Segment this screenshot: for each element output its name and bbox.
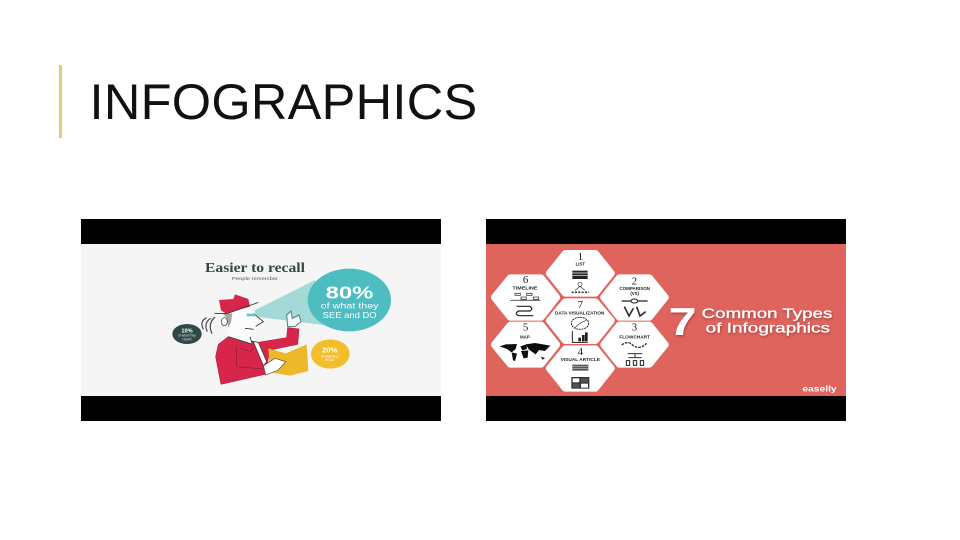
hair xyxy=(223,313,232,328)
heading: of infographics: of Infographics xyxy=(706,321,830,336)
callout: 80 percent xyxy=(308,269,391,331)
hexagon 1: list xyxy=(550,251,611,293)
hexagon 5: map: MAP xyxy=(520,335,530,340)
body and arm xyxy=(216,328,299,384)
hexagon 7: data visualization: 7 xyxy=(578,299,584,311)
hexagon 6: timeline: 6 xyxy=(523,274,529,286)
vision beam xyxy=(255,280,337,327)
callout: 10 percent: of what they xyxy=(178,334,196,338)
callout: 10 percent: HEAR xyxy=(182,337,192,341)
hexagon 6: timeline: TIMELINE xyxy=(512,285,538,290)
head xyxy=(226,306,263,344)
callout: 20 percent: of what they xyxy=(321,354,339,358)
figure: man reading a book xyxy=(202,294,308,384)
callout: 80 percent: of what they xyxy=(321,301,380,311)
hexagon 3: flowchart xyxy=(604,322,665,365)
eye xyxy=(247,314,255,316)
title accent bar xyxy=(59,65,62,138)
heading: easier to recall: Easier to recall xyxy=(205,260,305,275)
subheading: people remember: People remember xyxy=(232,276,279,281)
lower hand xyxy=(263,358,286,375)
hexagon 4: visual article xyxy=(550,346,611,389)
hexagon 4: visual article: VISUAL ARTICLE xyxy=(561,357,600,362)
hexagon 2: comparison xyxy=(604,275,665,317)
hexagon 7: data visualization: DATA VISUALIZATION xyxy=(555,311,604,316)
hexagon 5: map xyxy=(495,322,556,364)
hexagon 4: visual article: 4 xyxy=(578,346,584,358)
book xyxy=(268,344,308,376)
callout: 20 percent: READ xyxy=(325,358,335,362)
hexagon 1: list: LIST xyxy=(576,262,585,267)
panel: easier to recall image xyxy=(81,219,441,421)
hexagon 7: data visualization xyxy=(550,299,611,342)
callout: 10 percent: 10% xyxy=(181,328,193,334)
hexagon 6: timeline xyxy=(495,274,556,317)
hexagon 2: comparison: COMPARISON xyxy=(619,286,650,291)
callout: 10 percent xyxy=(172,324,202,344)
sound waves xyxy=(202,317,215,334)
hexagon 3: flowchart: 3 xyxy=(632,322,638,334)
jacket seams xyxy=(237,347,263,369)
tie xyxy=(253,342,267,366)
hexagon 5: map: 5 xyxy=(523,322,529,334)
callout: 20 percent: 20% xyxy=(322,346,338,355)
hexagon 1: list: 1 xyxy=(578,251,583,263)
heading: common types: Common Types xyxy=(702,306,833,321)
ear xyxy=(221,318,227,326)
hexagon 2: comparison: 2 xyxy=(632,275,637,287)
hexagon 3: flowchart: FLOWCHART xyxy=(619,335,650,340)
big numeral 7: 7 xyxy=(669,300,697,344)
panel: 7 common types image xyxy=(486,219,846,421)
callout: 20 percent xyxy=(311,339,350,369)
callout: 80 percent: 80% xyxy=(326,282,373,302)
callout: 80 percent: SEE and DO xyxy=(323,310,377,320)
raised hand xyxy=(287,311,301,327)
brand: easelly: easelly xyxy=(802,383,837,393)
title: INFOGRAPHICS xyxy=(90,73,478,130)
hat xyxy=(219,294,250,313)
hexagon 2: comparison: (VS) xyxy=(630,291,640,296)
